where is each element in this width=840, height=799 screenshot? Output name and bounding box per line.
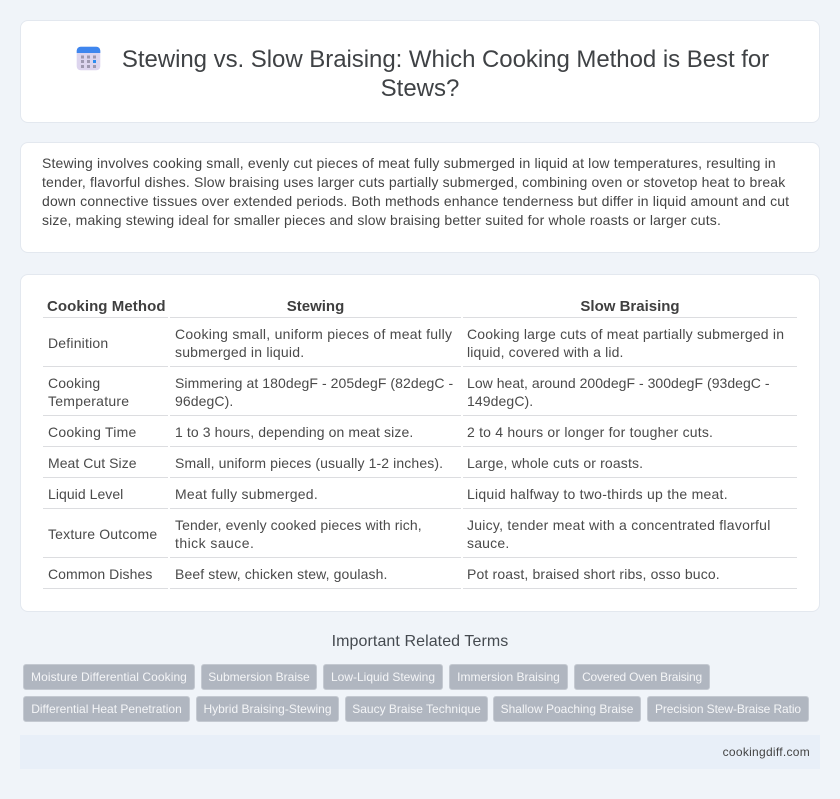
comparison table: Cooking Method: [47, 298, 166, 315]
comparison table: [43, 298, 797, 589]
intro text: tender, flavorful dishes. Slow braising uses larger cuts partially submerged, combining oven or stovetop heat to break: [42, 174, 785, 190]
comparison table: Cooking Time: [48, 424, 137, 440]
related term tags: Differential Heat Penetration: [31, 702, 182, 716]
related term tags: Submersion Braise: [208, 670, 310, 684]
comparison table: 1 to 3 hours, depending on meat size.: [175, 424, 413, 440]
comparison table: Common Dishes: [48, 566, 152, 582]
header panel: [20, 20, 820, 123]
comparison table panel: [20, 274, 820, 612]
comparison table: Liquid halfway to two-thirds up the meat.: [467, 486, 728, 502]
related term tags: Precision Stew-Braise Ratio: [655, 702, 801, 716]
related term tags: Covered Oven Braising: [582, 670, 702, 684]
comparison table: Meat Cut Size: [48, 455, 137, 471]
comparison table: Juicy, tender meat with a concentrated flavorful: [467, 517, 771, 533]
comparison table: Cooking small, uniform pieces of meat fully: [175, 326, 452, 342]
comparison table: Slow Braising: [580, 298, 680, 315]
comparison table: Definition: [48, 335, 108, 351]
comparison table: liquid, covered with a lid.: [467, 344, 624, 360]
footer: cookingdiff.com: [723, 745, 810, 759]
comparison table: Texture Outcome: [48, 526, 157, 542]
comparison table: 2 to 4 hours or longer for tougher cuts.: [467, 424, 713, 440]
intro text: down connective tissues over extended periods. Both methods enhance tenderness but differ in liquid amount and cut: [42, 193, 789, 209]
comparison table: Liquid Level: [48, 486, 123, 502]
comparison table: Small, uniform pieces (usually 1-2 inches).: [175, 455, 443, 471]
comparison table: Temperature: [48, 393, 129, 409]
comparison table: Simmering at 180degF - 205degF (82degC -: [175, 375, 453, 391]
comparison table: Stewing: [287, 298, 344, 315]
intro text: Stewing involves cooking small, evenly cut pieces of meat fully submerged in liquid at low temperatures, resulting in: [42, 155, 776, 171]
title: Stewing vs. Slow Braising: Which Cooking Method is Best for: [122, 46, 769, 73]
footer: [20, 735, 820, 769]
intro text: size, making stewing ideal for smaller pieces and slow braising better suited for whole roasts or larger cuts.: [42, 212, 721, 228]
related term tags: Immersion Braising: [457, 670, 560, 684]
intro text: [42, 155, 789, 228]
comparison table: Tender, evenly cooked pieces with rich,: [175, 517, 422, 533]
title: Stews?: [381, 75, 459, 102]
related terms heading: Important Related Terms: [332, 633, 508, 650]
comparison table: Cooking large cuts of meat partially submerged in: [467, 326, 784, 342]
comparison table: 149degC).: [467, 393, 533, 409]
icon: calendar: [76, 46, 100, 70]
comparison table: sauce.: [467, 535, 509, 551]
related term tags: Moisture Differential Cooking: [31, 670, 187, 684]
comparison table: Large, whole cuts or roasts.: [467, 455, 643, 471]
intro text panel: [20, 142, 820, 253]
comparison table: Beef stew, chicken stew, goulash.: [175, 566, 388, 582]
comparison table: Meat fully submerged.: [175, 486, 318, 502]
comparison table: 96degC).: [175, 393, 233, 409]
comparison table: submerged in liquid.: [175, 344, 304, 360]
related term tags: Shallow Poaching Braise: [501, 702, 633, 716]
related term tags: [23, 664, 809, 722]
related term tags: Hybrid Braising-Stewing: [203, 702, 332, 716]
related term tags: Saucy Braise Technique: [352, 702, 481, 716]
comparison table: Low heat, around 200degF - 300degF (93degC -: [467, 375, 770, 391]
comparison table: Cooking: [48, 375, 100, 391]
comparison table: thick sauce.: [175, 535, 254, 551]
title: [122, 46, 769, 102]
comparison table: Pot roast, braised short ribs, osso buco.: [467, 566, 720, 582]
related term tags: Low-Liquid Stewing: [331, 670, 435, 684]
